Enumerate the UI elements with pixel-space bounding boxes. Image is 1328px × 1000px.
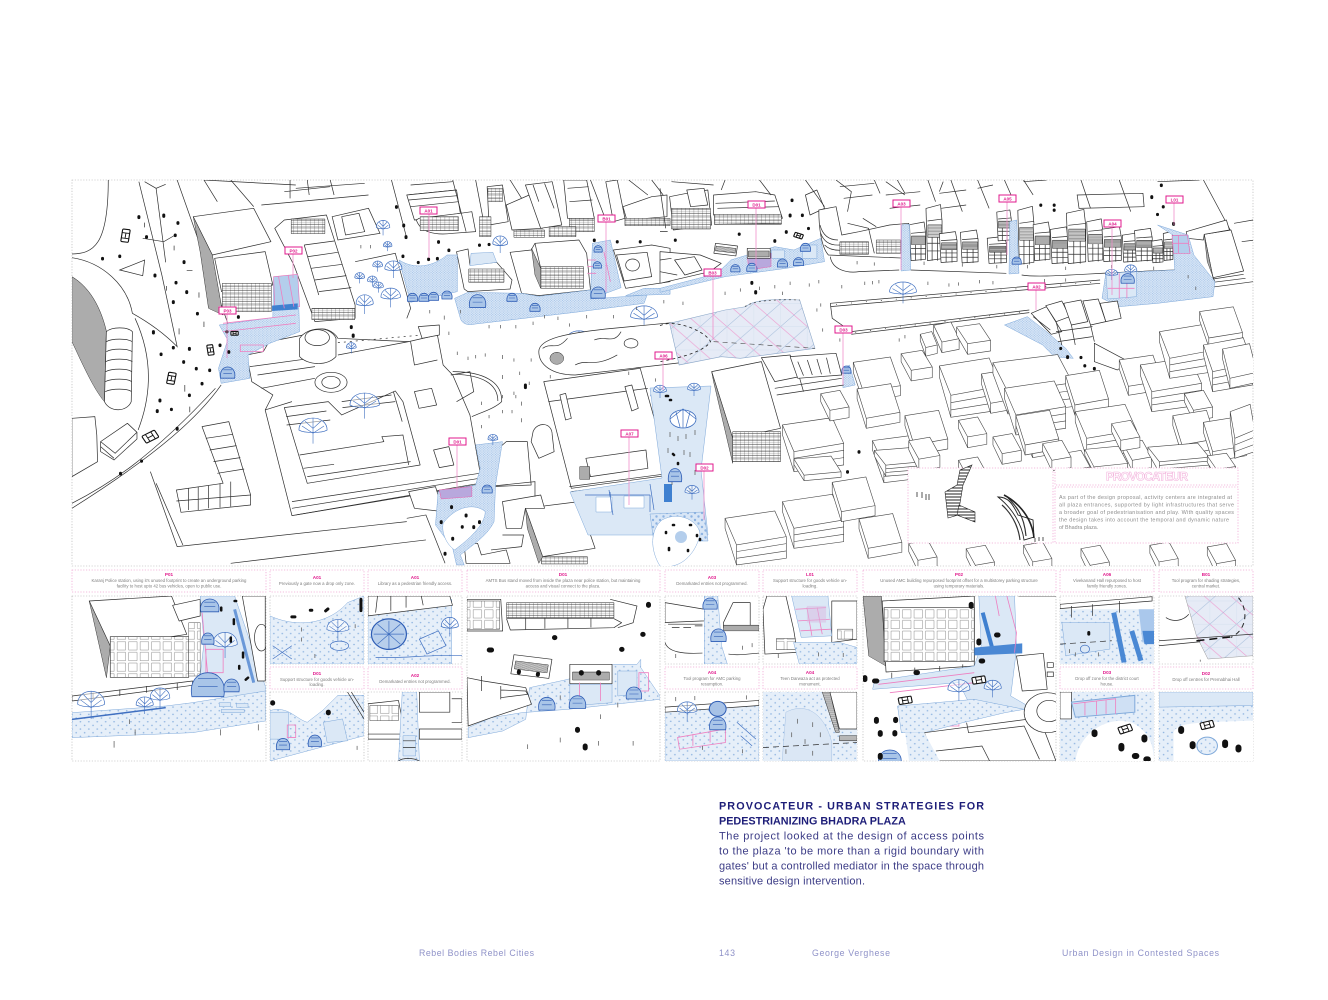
inset body text: of Bhadra plaza.: [1059, 525, 1098, 531]
description heading: [719, 800, 984, 828]
inset body text: As part of the design proposal, activity centers are integrated at: [1059, 495, 1232, 501]
panel A01 library: [368, 570, 462, 761]
panel A01 gate: A01: [313, 575, 322, 580]
panel D01 bus stand: access and visual connect to the plaza.: [526, 584, 600, 588]
tag A03: A03: [897, 202, 906, 206]
panel A03 entries: resumption.: [701, 682, 723, 686]
tag D02: D02: [700, 466, 709, 470]
panel P01 parking: facility to host upto 42 bus vehicles, open to public use.: [117, 584, 221, 588]
inset drawing panel: [908, 465, 1053, 543]
tag D03: [835, 326, 852, 333]
panel A06 family zones: [1060, 570, 1154, 761]
panel L01 support: A04: [806, 670, 815, 675]
curved hatched tower: [72, 277, 132, 410]
panel A03 entries: Demarkated entries not programmed.: [676, 581, 748, 586]
tag A06: A06: [659, 354, 668, 358]
panel P01 parking: P01: [165, 572, 174, 577]
blue intervention zones west: [218, 240, 670, 565]
panel B01 shading: Drop off centres for Premabhai Hall: [1172, 677, 1240, 682]
inset heading: PROVOCATEUR: [1106, 472, 1189, 484]
panel A01 library: Library as a pedestrian friendly access.: [378, 581, 452, 586]
north building cluster east of bus stand: [660, 180, 825, 283]
panel P02 multistorey parking: [863, 570, 1070, 764]
tag L01: L01: [1171, 198, 1179, 202]
panel A06 family zones: Drop off zone for the district court: [1075, 676, 1140, 681]
tag B03: B03: [708, 270, 717, 276]
page footer: 143: [719, 948, 735, 958]
map panel: isometric plan of Bhadra plaza: [72, 180, 1257, 576]
facade row of north street: [805, 180, 1230, 276]
panel A03 entries: Tool program for AMC parking: [683, 676, 741, 681]
pedestrians and vehicles as dark marks east: [666, 185, 1174, 472]
northern street buildings: [416, 180, 670, 237]
northeast corner block: [1186, 220, 1255, 288]
page footer: Rebel Bodies Rebel Cities: [419, 948, 535, 958]
panel B01 shading: [1159, 570, 1253, 761]
panel P02 multistorey parking: using temporary materials.: [934, 584, 984, 588]
panel A03 entries: A04: [708, 670, 717, 675]
panel P02 multistorey parking: Unused AMC building repurposed footprint offset for a multistorey parking structure: [880, 578, 1038, 583]
roads and roundabout: [72, 180, 426, 563]
description heading: PROVOCATEUR - URBAN STRATEGIES FOR: [719, 800, 984, 812]
inset body text: [1055, 487, 1238, 543]
panel A01 gate: [270, 570, 364, 761]
tag labels on map: [219, 195, 1183, 520]
inset body text: all plaza entrances, supported by light infrastructures that serve: [1059, 502, 1234, 508]
trees west: [220, 220, 671, 493]
tag D03: D03: [839, 328, 848, 332]
tag B01: B01: [602, 216, 611, 222]
tag A07: [621, 430, 638, 437]
panel L01 support: Teen Darwaza act as protected: [780, 676, 840, 681]
tag A03: [893, 200, 910, 207]
main Bhadra fort complex: [247, 325, 502, 516]
trees east: [731, 243, 1137, 373]
tag A05: [999, 195, 1016, 202]
panel A01 library: A01: [411, 575, 420, 580]
panel A01 library: Demarkated entries not programmed.: [379, 679, 451, 684]
provocateur inset: activity centers: [908, 465, 1238, 543]
tag P03: P03: [223, 308, 232, 314]
panel A06 family zones: D03: [1103, 670, 1112, 675]
panel L01 support: L01: [806, 572, 814, 577]
plaza south buildings: [407, 368, 670, 564]
tag A06: [655, 352, 672, 359]
panel L01 support: [763, 570, 857, 761]
vehicles west: [121, 223, 238, 443]
page footer: Urban Design in Contested Spaces: [1062, 948, 1220, 958]
panel L01 support: monument.: [799, 682, 821, 686]
page footer: [419, 948, 1220, 958]
plaza garden oval: [539, 321, 690, 375]
tag D02: [696, 464, 713, 471]
panel A03 entries: [665, 570, 759, 761]
tag A02: A02: [1032, 284, 1041, 290]
panel B01 shading: Tool program for shading strategies,: [1172, 578, 1240, 583]
panel A06 family zones: family friendly zones.: [1087, 584, 1127, 588]
description body: to the plaza 'to be more than a rigid boundary with: [719, 846, 984, 858]
blue intervention zones east: [660, 220, 1215, 388]
tag P03: [219, 307, 236, 314]
southwest low buildings: [72, 417, 251, 512]
panel L01 support: Support structure for goods vehicle un-: [773, 578, 848, 583]
description body: [719, 830, 984, 888]
tag A04: A04: [1108, 222, 1117, 226]
tag D01 bus: [748, 201, 765, 208]
panel A01 gate: Previously a gate now a drop only zone.: [279, 581, 355, 586]
carousel tree in zone: [670, 409, 696, 428]
tag A04: [1104, 220, 1121, 227]
tag A01: A01: [424, 208, 433, 214]
description body: The project looked at the design of access points: [719, 830, 984, 842]
tag L01: [1166, 196, 1183, 203]
panel A03 entries: A03: [708, 575, 717, 580]
tag D01: [449, 438, 466, 445]
shading canopy grid: [660, 299, 815, 365]
inset body text: a broader goal of pedestrianisation and play. With quality spaces: [1059, 510, 1234, 516]
panel L01 support: loading.: [802, 584, 818, 588]
panel D01 bus stand: AMTS Bus stand moved from inside the plaza near police station, but maintaining: [486, 578, 641, 583]
tag B01: [598, 215, 615, 222]
pedestrians light marks west: [361, 245, 656, 428]
panel P01 parking: Karanj Police station, using it's unused footprint to create an underground parking: [92, 578, 247, 583]
tag A01: [420, 207, 437, 214]
description body: sensitive design intervention.: [719, 876, 865, 888]
stacked lower-right blocks: [712, 307, 1257, 576]
tag D01: D01: [453, 440, 462, 444]
panel P01 parking: [72, 570, 268, 761]
tag A02: [1028, 283, 1045, 290]
east half of map: [660, 180, 1257, 576]
page footer: George Verghese: [812, 948, 890, 958]
tag B03: [704, 269, 721, 276]
map artwork clipped to frame: [72, 180, 1257, 576]
description heading: PEDESTRIANIZING BHADRA PLAZA: [719, 816, 906, 828]
central lower blue zone: [570, 386, 711, 567]
tag A05: A05: [1003, 196, 1012, 202]
panel B01 shading: D02: [1202, 671, 1211, 676]
panel D01 bus stand: D01: [559, 572, 568, 577]
panel A06 family zones: Vivekanand Hall repurposed to host: [1073, 578, 1142, 583]
northwest buildings: [193, 180, 460, 322]
panel A06 family zones: house.: [1101, 682, 1113, 686]
panel B01 shading: B01: [1202, 572, 1211, 577]
tag P02: P02: [289, 248, 298, 254]
pedestrians and vehicles as dark marks west: [103, 207, 666, 554]
facade row buildings beyond east zones: [1031, 299, 1129, 370]
panel D01 bus stand: [467, 570, 660, 761]
panel A01 gate: Support structure for goods vehicle un-: [280, 677, 355, 682]
panel A06 family zones: A06: [1103, 572, 1112, 577]
tag A07: A07: [625, 432, 634, 436]
tag P02: [285, 247, 302, 254]
tag D01 bus: D01: [752, 202, 761, 208]
pedestrians light marks east: [664, 261, 1196, 342]
panel P02 multistorey parking: P02: [955, 572, 964, 577]
description body: gates' but a controlled mediator in the space through: [719, 860, 984, 872]
buses east: [714, 232, 804, 258]
inset heading: [1055, 468, 1238, 485]
central plaza buildings: [457, 240, 670, 296]
panel A01 library: A02: [411, 673, 420, 678]
long plaza wall: [830, 280, 1100, 334]
panel A01 gate: loading.: [309, 682, 325, 687]
inset body text: the design takes into account the temporal and dynamic nature: [1059, 518, 1229, 524]
description text block: [719, 800, 984, 888]
caption strip and detail panels: [72, 570, 1253, 764]
west half of map: [72, 180, 690, 565]
panel A01 gate: D01: [313, 671, 322, 676]
panel B01 shading: central market.: [1192, 584, 1220, 588]
map frame: [72, 180, 1253, 566]
